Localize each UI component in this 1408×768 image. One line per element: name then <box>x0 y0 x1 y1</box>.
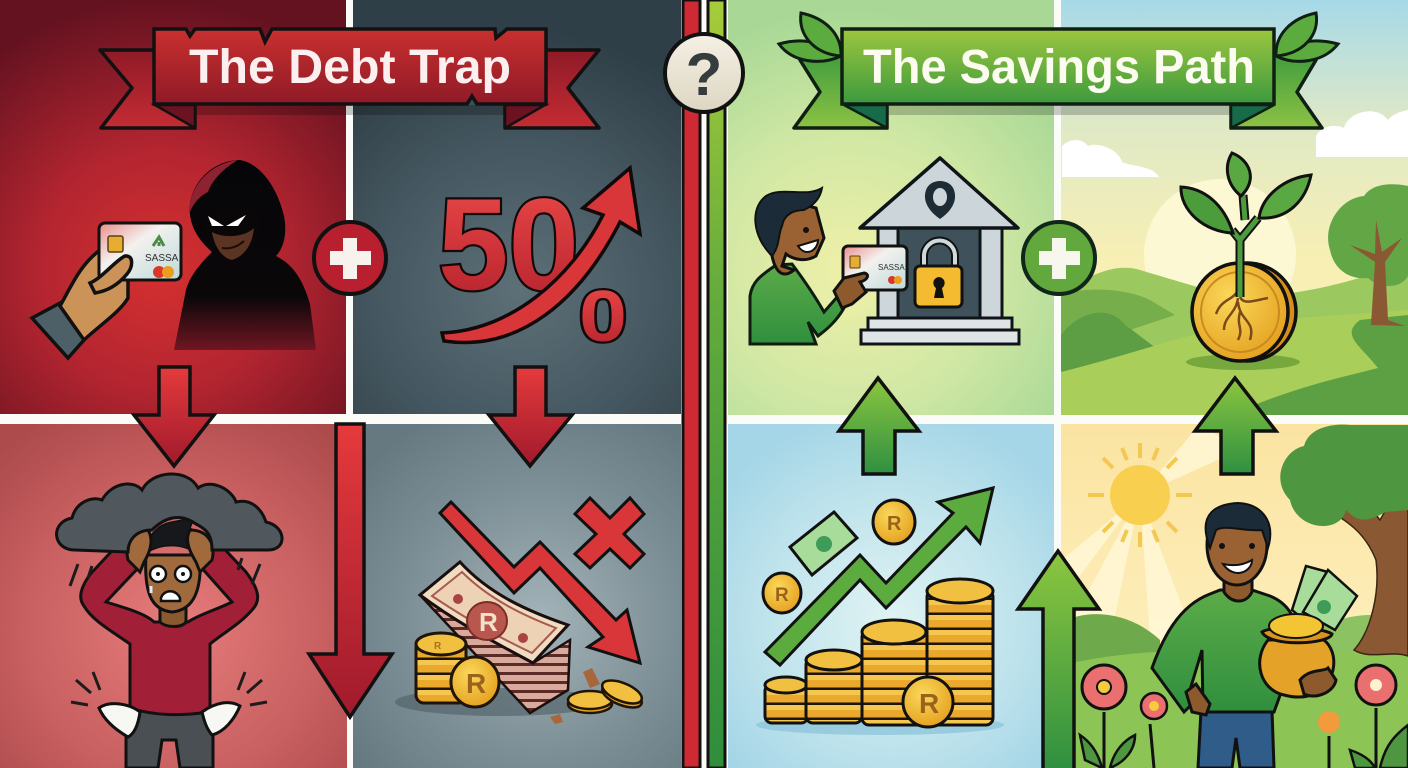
panel: seedling landscape <box>1061 0 1408 415</box>
icon: hooded scammer <box>174 160 316 350</box>
heading: debt title: The Debt Trap <box>189 41 511 94</box>
banner: The Debt Trap <box>100 29 599 128</box>
banner: The Savings Path <box>779 13 1338 128</box>
icon: floating coins and note: R <box>775 585 789 606</box>
heading: 50% rate: 50 <box>438 171 579 317</box>
icon: question mark <box>665 34 743 112</box>
heading: 50% rate: 0 <box>579 277 627 357</box>
arrow: long red down <box>309 424 392 717</box>
icon: large rand coin: R <box>919 688 939 719</box>
icon: man with card: SASSA <box>878 263 905 272</box>
icon: bank with lock <box>860 158 1019 344</box>
icon: banknote stack: R <box>479 607 498 637</box>
icon: left leaves <box>779 13 841 61</box>
icon: banknote stack <box>420 562 570 713</box>
icon: red cross <box>575 498 644 568</box>
icon: worried man under cloud <box>70 518 267 768</box>
icon: man with card <box>750 188 907 344</box>
icon: question mark: ? <box>686 41 722 108</box>
icon: red plus badge <box>314 222 386 294</box>
hills <box>1062 614 1160 680</box>
icon: falling arrow <box>440 502 640 663</box>
icon: banknotes <box>1292 566 1357 630</box>
icon: stacked coins: R <box>434 641 442 652</box>
icon: coin stacks <box>765 579 993 725</box>
panel: happy saver <box>1061 424 1408 768</box>
banner shadow left <box>190 105 510 115</box>
icon: stacked coins: R <box>466 668 486 699</box>
icon: pale sun disc <box>1144 179 1296 331</box>
icon: smiling man with gold pot <box>1152 503 1357 768</box>
panel: 50 percent interest <box>353 0 681 414</box>
icon: flowers <box>1080 665 1408 768</box>
panel: scam and card <box>0 0 346 414</box>
arrow: red down center <box>489 367 572 466</box>
arrow: red down left <box>134 367 214 466</box>
panel: bank <box>728 0 1054 415</box>
hills <box>1061 262 1408 415</box>
icon: green plus badge <box>1023 222 1095 294</box>
icon: lion emblem <box>925 181 955 219</box>
icon: gold pot <box>1260 614 1336 697</box>
icon: hand with card: SASSA <box>145 253 179 264</box>
icon: sun <box>1088 443 1192 547</box>
heading: 50% rate <box>438 171 627 357</box>
panel: growing savings <box>728 424 1054 768</box>
icon: seedling on coin <box>1181 153 1311 361</box>
icon: hand with card <box>32 223 181 358</box>
icon: storm cloud <box>57 474 282 552</box>
arrow: green up right <box>1195 378 1276 474</box>
icon: tree <box>1280 425 1408 656</box>
icon: rising red arrow <box>442 168 640 342</box>
center divider <box>683 0 725 768</box>
heading: savings title: The Savings Path <box>863 41 1255 94</box>
icon: tree <box>1328 184 1408 326</box>
arrow: long green up <box>1018 551 1099 768</box>
panel: money loss <box>353 424 681 768</box>
sun rays background <box>1062 424 1240 640</box>
icon: floating coins and note <box>763 500 915 613</box>
icon: right leaves <box>1276 13 1338 61</box>
arrow: green up left <box>839 378 919 474</box>
icon: rising green arrow <box>765 488 993 665</box>
clouds <box>1062 110 1408 177</box>
icon: floating coins and note: R <box>887 513 902 535</box>
panel: stress <box>0 424 347 768</box>
icon: stacked coins <box>416 633 499 707</box>
banner shadow right <box>885 105 1233 115</box>
icon: broken coins <box>550 668 645 724</box>
icon: large rand coin <box>903 677 953 727</box>
